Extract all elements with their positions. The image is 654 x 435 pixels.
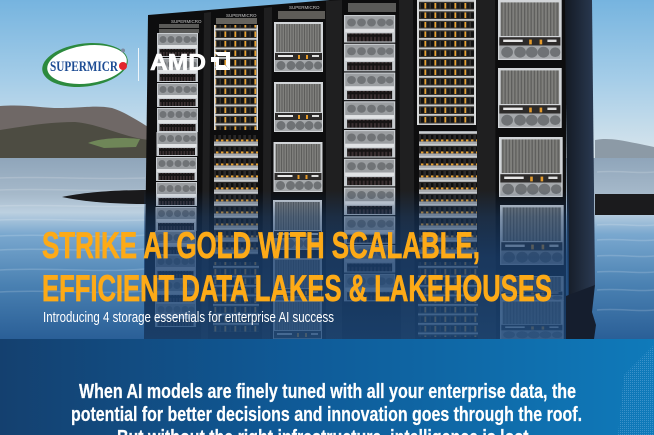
rack 1 servers: [155, 19, 202, 327]
rack dividers: [201, 0, 496, 339]
blue fade over lower photo: [144, 190, 569, 339]
rack 2 servers: SUPERMICRO: [226, 13, 257, 18]
panel: intro: [0, 339, 654, 435]
dotted decoration: [618, 345, 654, 435]
rack frame: [144, 0, 566, 339]
rack side panel: [565, 0, 595, 310]
lake water: [0, 158, 654, 339]
logo: AMD: AMD: [150, 49, 206, 75]
logo divider: [138, 48, 139, 81]
server racks: [144, 0, 595, 350]
rack 3 servers: SUPERMICRO: [289, 5, 320, 10]
title: [42, 225, 552, 309]
sky: [0, 0, 654, 160]
title: STRIKE AI GOLD WITH SCALABLE,: [42, 225, 480, 266]
rack 1 servers: SUPERMICRO: [171, 19, 202, 24]
rack 6 servers: [498, 0, 564, 340]
intro text: [71, 381, 582, 435]
rack 3 servers: [273, 5, 325, 350]
mountains: [0, 105, 654, 159]
rack foot and reflection: [566, 285, 596, 339]
rack 4 servers: [344, 3, 396, 301]
rack 2 servers: [213, 13, 259, 332]
subtitle: Introducing 4 storage essentials for enterprise AI success: [43, 310, 334, 326]
rack shadow on water: [62, 190, 654, 215]
logo: Supermicro: [40, 38, 130, 92]
rack 5 servers: [417, 0, 478, 337]
water ripples: [0, 171, 654, 311]
logo: AMD: [150, 49, 230, 75]
logo: Supermicro: SUPERMICR: [50, 59, 118, 75]
